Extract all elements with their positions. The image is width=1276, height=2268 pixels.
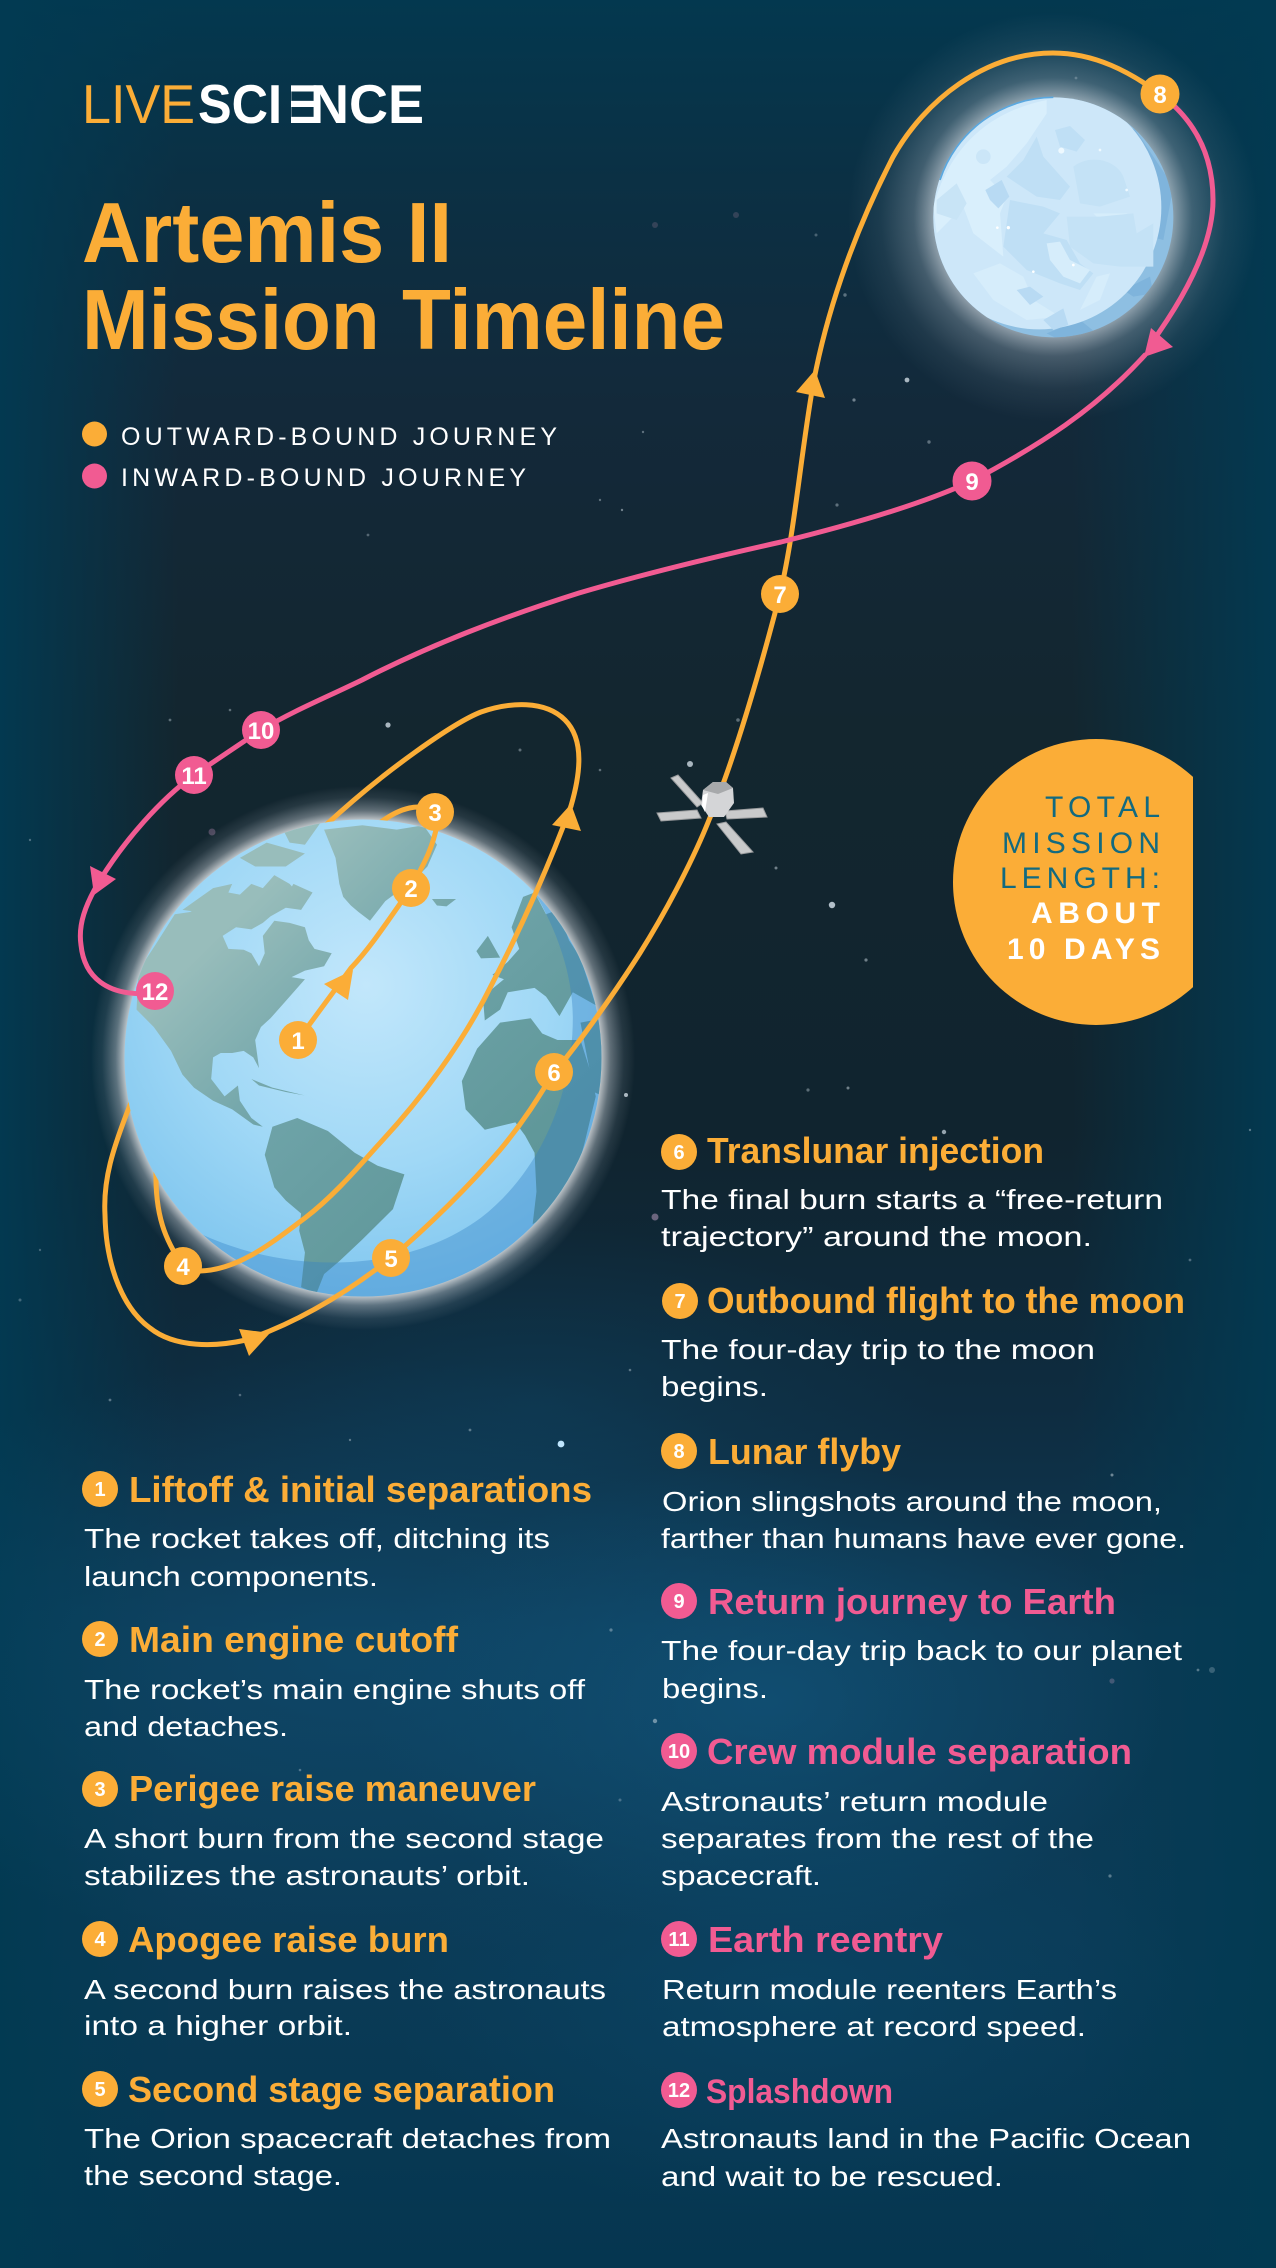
step 3: stabilizes the astronauts’ orbit. [84,1860,530,1891]
trajectory badges: 5 [384,1246,398,1273]
step 6: The final burn starts a “free-return [661,1184,1163,1215]
trajectory badges: 8 [1153,82,1167,109]
trajectory badges: 10 [248,718,274,745]
callout: total mission length: MISSION [1002,827,1160,860]
arabia [580,1019,602,1094]
step 2 [82,1619,585,1742]
africa [462,1018,596,1224]
step 8: Lunar flyby [708,1431,901,1472]
step 2: Main engine cutoff [129,1619,459,1660]
step 8: 8 [673,1441,685,1463]
step 12 [661,2072,1191,2192]
callout: total mission length: ABOUT [1031,897,1160,930]
step 1 [82,1469,592,1592]
step 1: launch components. [84,1561,378,1592]
step 5: The Orion spacecraft detaches from [84,2123,611,2154]
step 9 [661,1581,1182,1704]
earth [124,820,607,1305]
greenland [324,825,437,921]
step 9: begins. [662,1673,768,1704]
trajectory badges: 4 [176,1254,190,1281]
step 10: Astronauts’ return module [661,1786,1048,1817]
step 1: The rocket takes off, ditching its [84,1523,550,1554]
spacecraft [657,775,767,854]
step 11: Earth reentry [708,1919,943,1960]
step 9: Return journey to Earth [708,1581,1116,1622]
trajectory badges: 9 [965,469,979,496]
south america [265,1118,404,1294]
step 8: farther than humans have ever gone. [661,1523,1186,1554]
step 11: atmosphere at record speed. [662,2011,1086,2042]
trajectory badges: 3 [428,800,442,827]
step 5: Second stage separation [128,2069,555,2110]
moon [866,29,1241,404]
north america [137,875,332,1127]
europe [483,893,596,1020]
legend: OUTWARD-BOUND JOURNEY [121,423,557,451]
step 6: 6 [673,1142,685,1164]
step 12: Astronauts land in the Pacific Ocean [661,2123,1191,2154]
step 1: 1 [94,1479,106,1501]
title: Mission Timeline [82,273,725,368]
step 6: trajectory” around the moon. [661,1221,1092,1252]
arrows [90,328,1173,1356]
trajectory badges: 6 [547,1060,561,1087]
step 6 [661,1130,1163,1252]
step 11: Return module reenters Earth’s [662,1974,1117,2005]
step 2: and detaches. [84,1711,288,1742]
trajectory badges: 11 [181,763,207,790]
trajectory badges: 1 [291,1028,305,1055]
step 4: into a higher orbit. [84,2010,352,2041]
step 5: the second stage. [84,2160,342,2191]
step 8 [661,1431,1186,1554]
title: Artemis II [82,186,452,281]
step 3: 3 [94,1779,106,1801]
background stars [18,77,1251,1878]
trajectory badges: 7 [773,582,787,609]
earth glow and rear orbit segments [91,705,635,1345]
legend: INWARD-BOUND JOURNEY [121,464,526,492]
step 7: begins. [661,1371,768,1402]
step 12: Splashdown [706,2073,893,2111]
trajectory badges [136,74,1180,1285]
iceland and uk [432,899,500,958]
logo: SCI [198,73,282,135]
caribbean [251,1079,305,1095]
dark crescent [202,893,607,1305]
step 4: Apogee raise burn [128,1919,449,1960]
trajectory badges: 2 [404,876,418,903]
arctic islands [182,823,320,912]
step 4: A second burn raises the astronauts [84,1974,606,2005]
step 11: 11 [668,1929,690,1951]
inbound trajectory [80,94,1213,994]
callout: total mission length [953,739,1193,1025]
callout: total mission length: TOTAL [1045,791,1160,824]
outbound trajectory [200,53,1160,1340]
logo: NCE [310,73,424,135]
callout: total mission length: LENGTH: [1000,862,1160,895]
step 10: separates from the rest of the [661,1823,1094,1854]
step 4 [82,1919,606,2041]
step 9: 9 [673,1591,685,1613]
step 12: and wait to be rescued. [661,2161,1003,2192]
step 11 [661,1919,1117,2042]
logo: E [278,73,320,135]
step 6: Translunar injection [707,1130,1044,1171]
step 8: Orion slingshots around the moon, [662,1486,1162,1517]
logo: LIVE [82,73,195,135]
step 3: A short burn from the second stage [84,1823,604,1854]
title [82,186,725,368]
trajectory badges: 12 [142,979,168,1006]
step 12: 12 [668,2080,690,2102]
step 1: Liftoff & initial separations [129,1469,592,1510]
callout: total mission length: 10 DAYS [1007,933,1160,966]
step 7: The four-day trip to the moon [661,1334,1095,1365]
step 3: Perigee raise maneuver [129,1768,536,1809]
step 10: spacecraft. [661,1860,821,1891]
step 3 [82,1768,604,1891]
step 9: The four-day trip back to our planet [661,1635,1182,1666]
step 5 [82,2069,611,2191]
step 10: Crew module separation [707,1731,1132,1772]
step 10 [661,1731,1132,1891]
step 2: 2 [94,1629,106,1651]
step 2: The rocket’s main engine shuts off [84,1674,585,1705]
step 7: 7 [674,1291,686,1313]
step 4: 4 [94,1929,106,1951]
legend [82,422,557,492]
step 7: Outbound flight to the moon [707,1280,1185,1321]
step 5: 5 [94,2079,106,2101]
logo [86,84,422,124]
step 10: 10 [668,1741,690,1763]
step 7 [661,1280,1185,1402]
